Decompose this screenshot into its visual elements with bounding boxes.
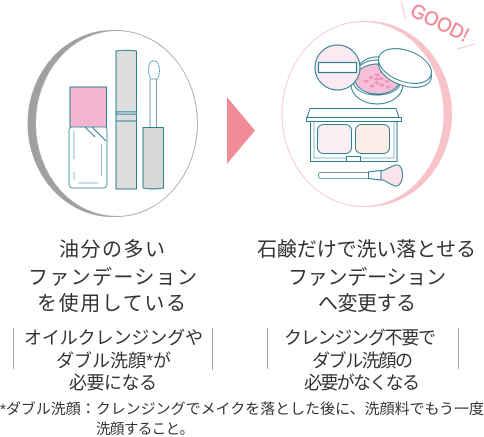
heading: left: を使用している: [37, 292, 186, 315]
footnote: [0, 400, 484, 437]
panel: right note: ダブル洗顔の: [312, 350, 413, 371]
arrow: [227, 97, 255, 164]
heading: left: ファンデーション: [28, 266, 197, 289]
footnote: *ダブル洗顔：クレンジングでメイクを落とした後に、洗顔料でもう一度: [0, 400, 484, 418]
panel: left note: ダブル洗顔*が: [56, 350, 171, 371]
heading: right: ファンデーション: [288, 266, 446, 289]
icon: compact lid: [374, 42, 436, 94]
panel: right note: クレンジング不要で: [284, 328, 436, 348]
heading: left: 油分の多い: [59, 238, 165, 261]
panel: left note: 必要になる: [69, 373, 157, 393]
panel: right note: 必要がなくなる: [304, 373, 420, 393]
icon: concealer tube: [116, 50, 136, 189]
panel: left note: オイルクレンジングや: [24, 328, 203, 348]
left circle with grey crescent: [28, 30, 198, 217]
GOOD badge: GOOD!: [407, 0, 472, 47]
panel: right note: [268, 328, 458, 393]
icon: puff: [315, 45, 360, 90]
icon: mascara wand: [143, 61, 164, 189]
right circle with pink crescent: [282, 21, 452, 207]
icon: makeup brush: [318, 165, 402, 186]
heading: right: [257, 238, 476, 315]
panel: left note: [14, 328, 212, 393]
icon: eyeshadow palette: [306, 108, 402, 162]
icon: foundation bottle: [69, 87, 107, 188]
icon: powder compact: [351, 42, 436, 104]
heading: right: へ変更する: [318, 292, 416, 315]
heading: right: 石鹸だけで洗い落とせる: [257, 238, 476, 261]
heading: left: [28, 238, 197, 315]
